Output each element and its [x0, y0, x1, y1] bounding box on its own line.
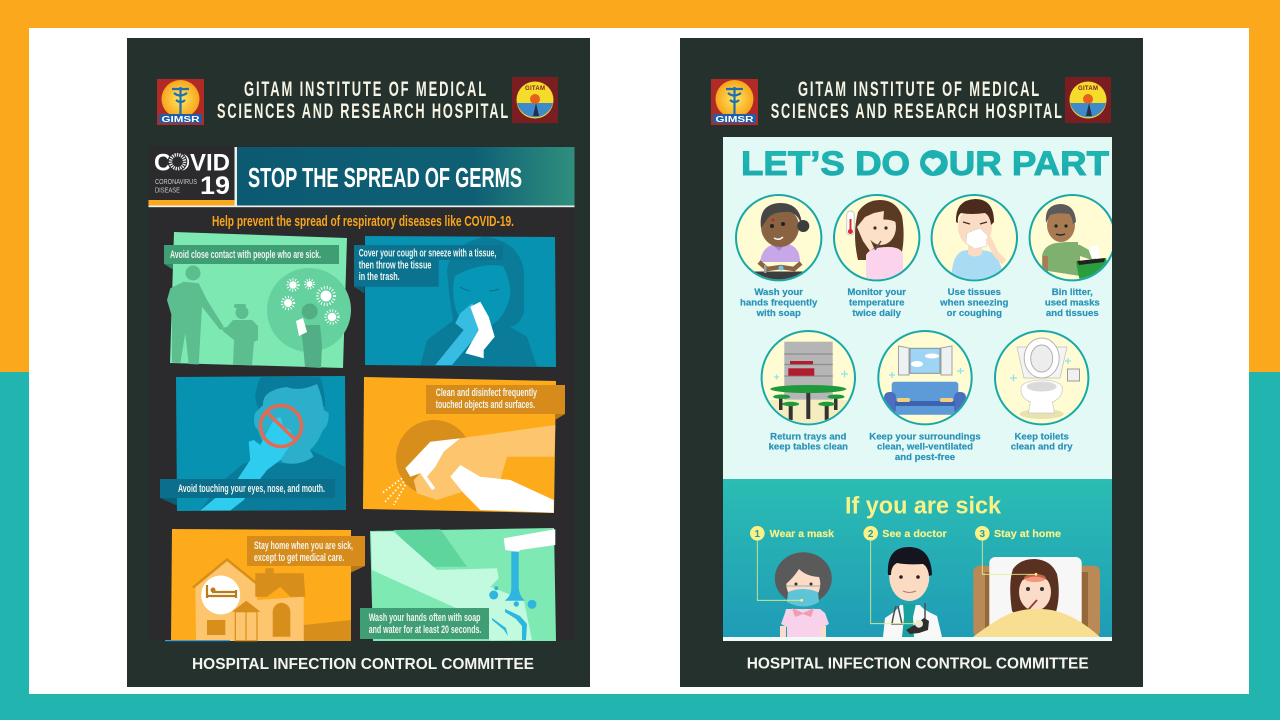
label: avoid close contact: [164, 245, 339, 270]
step 2: see a doctor: 2: [868, 529, 874, 540]
text: monitor temperature: Monitor your: [847, 287, 906, 298]
panel: clean and disinfect: [363, 377, 565, 513]
label: wash hands: and water for at least 20 seconds.: [369, 624, 481, 636]
text: keep toilets: Keep toilets: [1015, 431, 1069, 442]
text: keep toilets: clean and dry: [1011, 442, 1073, 453]
banner: COVID 19 badge: CORONAVIRUS: [155, 179, 197, 186]
logo: GIMSR: [711, 79, 758, 125]
label: cover cough: [354, 245, 503, 293]
text: keep surroundings: Keep your surroundings: [869, 431, 981, 442]
panel: cover cough or sneeze: [354, 236, 556, 367]
text: use tissues: Use tissues: [948, 287, 1001, 298]
heading: institute name: GITAM INSTITUTE OF MEDICAL: [798, 78, 1041, 101]
label: stay home: Stay home when you are sick,: [254, 540, 353, 552]
background: teal bottom band: [0, 372, 1280, 720]
step 3: stay at home: [975, 526, 1061, 576]
text: monitor temperature: twice daily: [852, 308, 902, 319]
icon: water and bubbles: [489, 552, 536, 640]
panel: stay home: [165, 529, 365, 641]
heading: institute name: SCIENCES AND RESEARCH HOSPITAL: [771, 100, 1064, 123]
panel: wash hands: [360, 528, 556, 641]
title: let's do our part: LET’S DO OUR PART: [741, 145, 1109, 183]
label: clean and disinfect: [426, 385, 565, 420]
text: use tissues: or coughing: [947, 308, 1002, 319]
panel: avoid close contact: [164, 232, 351, 368]
text: bin litter: Bin litter,: [1052, 287, 1093, 298]
step 3: stay at home: 3: [980, 529, 986, 540]
icon: toilet circle: [995, 331, 1088, 424]
text: keep surroundings: and pest-free: [895, 452, 955, 463]
text: return trays: Return trays and: [770, 431, 847, 442]
icon: tap: [504, 529, 555, 552]
label: avoid touching: Avoid touching your eyes, nose, and mouth.: [178, 483, 325, 495]
banner: COVID 19 badge: DISEASE: [155, 188, 180, 194]
logo: GITAM: GITAM: [525, 86, 545, 92]
heading: institute name: SCIENCES AND RESEARCH HOSPITAL: [217, 100, 510, 123]
background: orange top band: [0, 0, 1280, 372]
icon: trays and tables circle: [760, 331, 860, 430]
banner: stop the spread of germs: [148, 147, 574, 207]
icon: temperature circle: [834, 195, 919, 281]
step 2: see a doctor: See a doctor: [882, 528, 947, 540]
text: wash hands: with soap: [756, 308, 801, 319]
icon: surroundings circle: [878, 331, 972, 424]
text: return trays: keep tables clean: [769, 442, 848, 453]
logo: GIMSR: GIMSR: [162, 115, 200, 124]
step 2: see a doctor: [863, 526, 947, 625]
text: use tissues: when sneezing: [939, 298, 1009, 309]
label: stay home: except to get medical care.: [254, 552, 344, 564]
heading: institute name: [771, 78, 1064, 123]
text: wash hands: Wash your: [754, 287, 803, 298]
icon: bin litter circle: [1030, 195, 1115, 282]
footer: committee name: HOSPITAL INFECTION CONTROL COMMITTEE: [747, 656, 1089, 672]
icon: child silhouette: [221, 304, 258, 365]
poster: stop the spread of germs: [127, 38, 590, 687]
text: return trays: [769, 431, 848, 453]
banner: stop the spread of germs: STOP THE SPREAD OF GERMS: [248, 162, 522, 193]
text: keep surroundings: [869, 431, 981, 463]
icon: prohibition sign: [260, 406, 302, 446]
logo: GITAM: GITAM: [1078, 86, 1098, 92]
step 1: wear a mask: [750, 526, 834, 602]
label: cover cough: Cover your cough or sneeze with a tissue,: [359, 248, 496, 260]
panel: avoid touching face: [160, 376, 346, 511]
logo: GITAM: [1065, 77, 1111, 123]
text: monitor temperature: temperature: [849, 298, 904, 309]
banner: COVID 19 badge: 19: [200, 172, 230, 200]
icon: sick woman: [296, 304, 322, 368]
text: monitor temperature: [847, 287, 906, 319]
step 3: stay at home: Stay at home: [994, 528, 1061, 540]
logo: GIMSR: GIMSR: [716, 115, 754, 124]
heading: institute name: [217, 78, 510, 123]
heading: institute name: GITAM INSTITUTE OF MEDICAL: [244, 78, 488, 101]
label: cover cough: in the trash.: [359, 271, 400, 283]
text: bin litter: and tissues: [1046, 308, 1099, 319]
figure: woman with mask: [775, 552, 832, 637]
poster: let's do our part: [680, 38, 1143, 687]
banner: COVID 19 badge: [148, 147, 234, 206]
icon: house: [193, 560, 305, 641]
icon: virus particles: [282, 280, 338, 324]
heading: if you are sick: If you are sick: [845, 493, 1002, 520]
label: cover cough: then throw the tissue: [359, 260, 431, 272]
text: wash hands: hands frequently: [740, 298, 818, 309]
poster body dark panel: [148, 146, 574, 641]
icon: wash hands circle: [736, 195, 821, 282]
label: avoid close contact: Avoid close contact with people who are sick.: [170, 249, 321, 261]
logo: GITAM: [512, 77, 558, 123]
figure: bed and sick woman: [973, 557, 1100, 637]
text: bin litter: used masks: [1045, 298, 1100, 309]
text: bin litter: [1045, 287, 1100, 319]
label: clean and disinfect: Clean and disinfect frequently: [436, 387, 538, 399]
banner: COVID 19 badge: COVID: [154, 150, 230, 177]
label: stay home: [247, 536, 365, 572]
text: keep surroundings: clean, well-ventilated: [877, 442, 973, 453]
label: clean and disinfect: touched objects and surfaces.: [436, 399, 535, 411]
panel: if you are sick: [723, 479, 1112, 641]
panel: do our part main: [723, 137, 1115, 641]
footer: committee name: HOSPITAL INFECTION CONTROL COMMITTEE: [192, 656, 534, 673]
label: wash hands: [360, 608, 489, 639]
icon: spray dots: [382, 478, 405, 505]
figure: doctor: [883, 547, 942, 637]
step 1: wear a mask: 1: [755, 529, 761, 540]
step 1: wear a mask: Wear a mask: [770, 528, 834, 540]
icon: tissues circle: [932, 195, 1017, 285]
logo: GIMSR: [157, 79, 204, 125]
text: keep toilets: [1011, 431, 1073, 453]
text: use tissues: [939, 287, 1009, 319]
label: wash hands: Wash your hands often with soap: [369, 612, 481, 624]
label: avoid touching: [160, 479, 335, 506]
text: wash hands: [740, 287, 818, 319]
icon: adult silhouette: [167, 266, 224, 364]
subheading: help prevent: Help prevent the spread of respiratory diseases like COVID-19.: [212, 213, 514, 230]
